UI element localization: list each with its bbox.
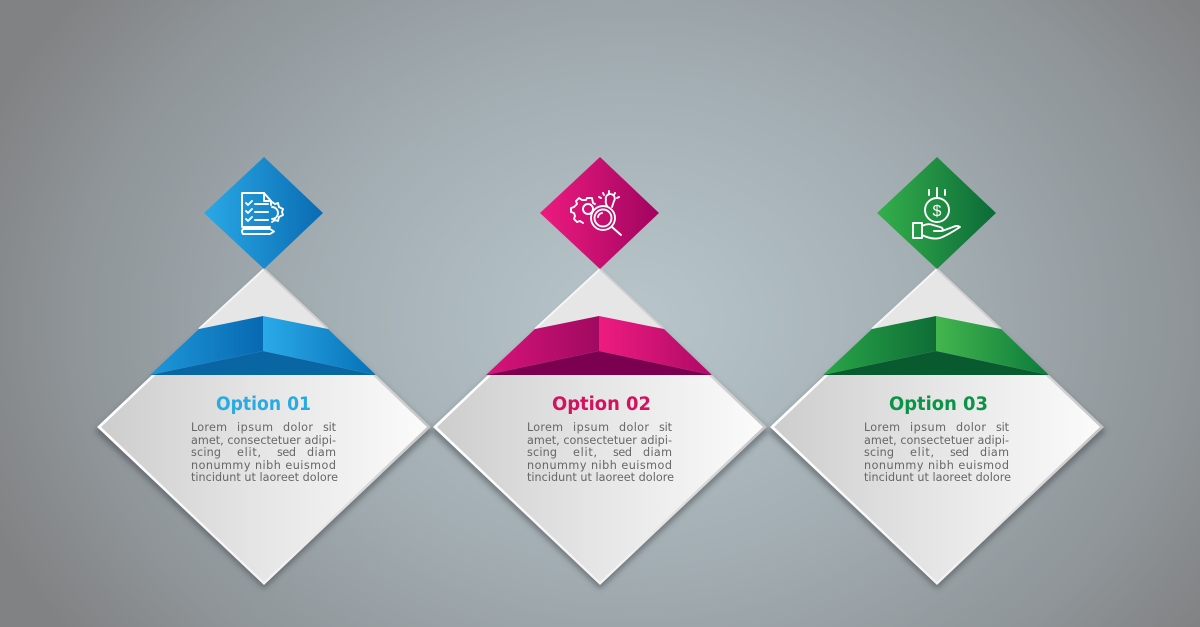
diamond card [433,269,767,585]
body text: diam [980,446,1009,459]
body text: elit, [237,446,261,459]
body text: Lorem [191,421,227,434]
body text: nonummy nibh euismod [864,459,1009,472]
body text: tincidunt ut laoreet dolore [527,471,674,484]
body text: ipsum [573,421,609,434]
body text: amet, consectetuer adipi- [864,434,1009,447]
body text: sed [277,446,296,459]
body text: ipsum [910,421,946,434]
body text: scing [191,446,221,459]
body text: dolor [619,421,649,434]
body text: diam [307,446,336,459]
green fold band [823,316,1049,375]
top facet [199,269,328,329]
body text: sit [996,421,1010,434]
title: Option 03 [889,394,988,415]
blue fold band [150,316,376,375]
body text: nonummy nibh euismod [527,459,672,472]
panel: option 03 [768,157,1106,589]
diamond shadow [95,273,433,589]
body text: elit, [573,446,597,459]
diamond card [97,269,431,585]
icon: coin over open hand [913,188,960,239]
body text: tincidunt ut laoreet dolore [864,471,1011,484]
icon diamond [540,157,659,269]
body text: scing [864,446,894,459]
panel: option 02 [431,157,769,589]
diamond shadow [768,273,1106,589]
body text: sit [323,421,337,434]
diamond card [770,269,1104,585]
title: Option 02 [552,394,651,415]
body text: sed [613,446,632,459]
body text: ipsum [237,421,273,434]
body text: elit, [910,446,934,459]
title: Option 01 [216,394,311,415]
diamond shadow [431,273,769,589]
body text: sed [950,446,969,459]
panel: option 01 [95,157,433,589]
body text: amet, consectetuer adipi- [527,434,672,447]
body text: diam [643,446,672,459]
icon: checklist and gear [242,193,283,234]
top facet [872,269,1001,329]
icon: gear, magnifier and bulb [571,191,621,235]
icon diamond [877,157,996,269]
icon: coin over open hand: $ [933,203,942,220]
body text: sit [659,421,673,434]
body text: dolor [956,421,986,434]
icon diamond [204,157,323,269]
magenta fold band [486,316,712,375]
body text: Lorem [527,421,563,434]
body text: scing [527,446,557,459]
body text: nonummy nibh euismod [191,459,336,472]
body text: dolor [283,421,313,434]
body text: amet, consectetuer adipi- [191,434,336,447]
body text: Lorem [864,421,900,434]
top facet [535,269,664,329]
body text: tincidunt ut laoreet dolore [191,471,338,484]
